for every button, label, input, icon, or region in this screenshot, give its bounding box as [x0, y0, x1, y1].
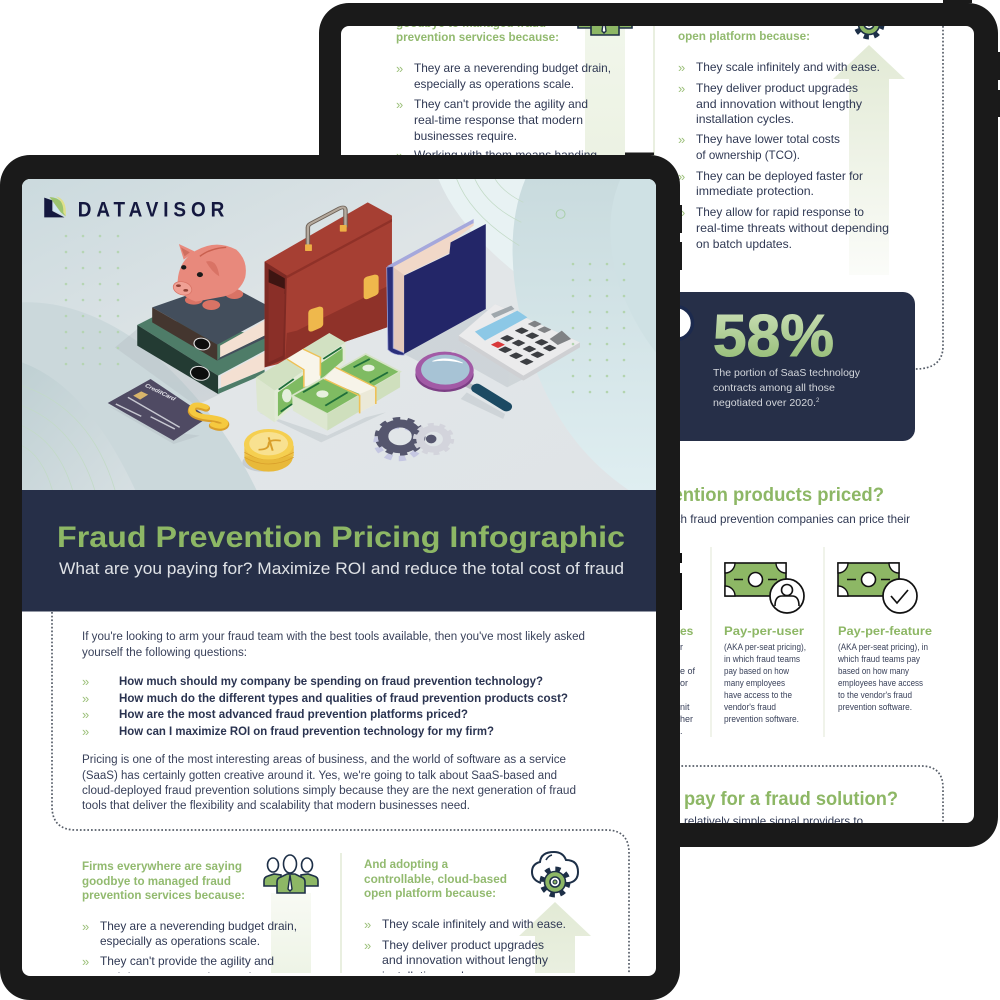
right column: cloud platform: installation cycles.	[382, 969, 480, 983]
question list: How are the most advanced fraud prevention platforms priced?	[119, 709, 468, 721]
left column: managed services: goodbye to managed fraud	[82, 874, 231, 888]
column: pay-per-user: (AKA per-seat pricing),	[724, 642, 806, 652]
icon: people (back)	[577, 26, 633, 36]
clipped body line: relatively simple signal providers to	[684, 814, 863, 828]
right column list on back page: immediate protection.	[696, 184, 814, 198]
icon: cash with user	[725, 563, 804, 613]
dotted connector top	[915, 26, 943, 369]
clipped column: pricing model text	[680, 553, 695, 734]
illustration: money stacks	[256, 333, 400, 431]
column: pay-per-user: pay based on how	[724, 666, 789, 676]
right column: cloud platform: and innovation without lengthy	[382, 953, 548, 967]
right column: cloud platform: controllable, cloud-based	[364, 872, 507, 886]
front tablet bezel	[0, 152, 682, 1000]
illustration: credit card	[108, 379, 208, 441]
icon: cloud gear	[532, 852, 578, 895]
stat panel: 58%: 58%	[713, 303, 834, 369]
pricing paragraph: cloud-deployed fraud prevention solutions simply because they are the next generation of fraud	[82, 785, 576, 797]
right column list on back page: They scale infinitely and with ease.	[696, 60, 880, 74]
stat panel: 58%: contracts among all those	[713, 382, 835, 394]
dotted connector bottom	[681, 765, 944, 822]
right column list on back page: installation cycles.	[696, 112, 794, 126]
hero illustration	[22, 179, 656, 490]
left column list on back page: They are a neverending budget drain,	[414, 61, 611, 75]
right column list on back page: »	[678, 81, 685, 96]
right column list on back page: »	[678, 205, 685, 220]
pricing paragraph: tools that deliver the flexibility and scalability that modern businesses need.	[82, 800, 470, 812]
left column list on back page: »	[396, 61, 403, 76]
left column list on back page: »	[396, 97, 403, 112]
column: pay-per-user: have access to the	[724, 690, 792, 700]
stat panel: 58%: negotiated over 2020.	[713, 397, 816, 409]
back tablet bezel	[319, 0, 1000, 847]
icon: people	[264, 855, 318, 893]
title: Fraud Prevention Pricing Infographic	[57, 521, 625, 554]
column divider	[340, 853, 342, 973]
left column: managed services: »	[82, 954, 89, 969]
question list: »	[82, 691, 89, 706]
icon: cash with check	[838, 563, 917, 613]
right column list on back page: They have lower total costs	[696, 132, 840, 146]
title band	[22, 490, 656, 612]
left column list on back page	[396, 26, 610, 155]
right column list on back page: on batch updates.	[696, 237, 792, 251]
column: pay-per-user: many employees	[724, 678, 785, 688]
right column: cloud platform: open platform because:	[364, 886, 496, 900]
intro paragraph: If you're looking to arm your fraud team with the best tools available, then you've most likely asked	[82, 631, 585, 643]
right column list on back page: open platform because:	[678, 29, 810, 43]
column: pay-per-user: in which fraud teams	[724, 654, 800, 664]
subtitle: What are you paying for? Maximize ROI and reduce the total cost of fraud	[59, 559, 624, 578]
clipped column: pricing model text: es	[680, 624, 694, 638]
right column: cloud platform: They deliver product upgrades	[382, 938, 544, 952]
clipped column: pricing model text: e of	[680, 666, 696, 676]
column: pay-per-feature: to the vendor's fraud	[838, 690, 912, 700]
clipped column: pricing model text: .	[680, 726, 683, 736]
column: pay-per-feature	[837, 563, 932, 712]
column: pay-per-user: vendor's fraud	[724, 702, 776, 712]
clipped column: pricing model text: nit	[680, 702, 690, 712]
left column list on back page: especially as operations scale.	[414, 77, 574, 91]
right column list on back page: They can be deployed faster for	[696, 169, 863, 183]
front tablet	[0, 152, 682, 1000]
front tablet screen	[22, 179, 656, 984]
illustration: piggy bank	[170, 244, 246, 310]
illustration: credit card: CreditCard	[143, 383, 177, 403]
clipped column: pricing model text: or	[680, 678, 688, 688]
left column: managed services: They are a neverending budget drain,	[100, 919, 297, 933]
left column list on back page: businesses require.	[414, 129, 517, 143]
left column: managed services: real-time response that modern	[100, 970, 269, 984]
right column list on back page: real-time threats without depending	[696, 221, 889, 235]
page body clipped	[52, 612, 629, 984]
right column list on back page: »	[678, 132, 685, 147]
column: pay-per-user: Pay-per-user	[724, 624, 804, 638]
icon: cloud gear (back)	[854, 26, 884, 40]
right column list on back page	[678, 29, 889, 251]
pricing paragraph	[82, 754, 576, 812]
right column: cloud platform: And adopting a	[364, 857, 448, 871]
back tablet screen	[341, 0, 974, 828]
column: pay-per-feature: Pay-per-feature	[838, 624, 932, 638]
heading: products priced: How are fraud prevention products priced?	[505, 485, 884, 506]
illustration: gold coins	[242, 429, 294, 472]
left column: managed services: They can't provide the agility and	[100, 954, 274, 968]
illustration: floor shadows	[108, 309, 523, 444]
right column list on back page: of ownership (TCO).	[696, 148, 800, 162]
left column list on back page: Working with them means handing	[414, 148, 597, 162]
question list: How can I maximize ROI on fraud prevention technology for my firm?	[119, 726, 494, 738]
right column list on back page: They allow for rapid response to	[696, 205, 864, 219]
stat panel: 58%	[680, 292, 915, 441]
green strip behind people icon	[271, 893, 311, 973]
illustration: folder	[387, 219, 486, 355]
right column list on back page: They deliver product upgrades	[696, 81, 858, 95]
column: pay-per-feature: which fraud teams pay	[837, 654, 920, 664]
illustration: magnifying glass	[415, 352, 506, 407]
logo: Datavisor	[44, 196, 224, 218]
question list: How much do the different types and qualities of fraud prevention products cost?	[119, 693, 568, 705]
left column list on back page: goodbye to managed fraud	[396, 16, 546, 30]
question list: »	[82, 707, 89, 722]
right column list on back page: »	[678, 60, 685, 75]
right column list on back page: and innovation without lengthy	[696, 97, 862, 111]
illustration: calculator	[459, 304, 580, 381]
illustration: gears	[377, 420, 451, 459]
pricing paragraph: (SaaS) has certainly gotten creative around it. Yes, we're going to talk about SaaS-based and	[82, 770, 557, 782]
left column: managed services: Firms everywhere are saying	[82, 859, 242, 873]
green strip behind people icon	[585, 26, 625, 161]
dot grid left	[65, 235, 119, 365]
arrow: upward growth (back)	[833, 45, 905, 275]
column: pay-per-feature: based on how many	[838, 666, 909, 676]
right column list on back page: »	[678, 169, 685, 184]
illustration: briefcase	[265, 202, 392, 367]
question list: »	[82, 724, 89, 739]
column: pay-per-feature: (AKA per-seat pricing), in	[838, 642, 928, 652]
column: pay-per-user	[724, 563, 806, 724]
illustration: dollar sign	[192, 405, 225, 428]
right column: cloud platform	[364, 857, 566, 983]
back tablet	[319, 0, 1000, 847]
clipped column: pricing model text: her	[680, 714, 693, 724]
left column: managed services: especially as operations scale.	[100, 934, 260, 948]
left column list on back page: They can't provide the agility and	[414, 97, 588, 111]
left column list on back page: prevention services because:	[396, 30, 559, 44]
stat panel: 58%: 2	[816, 398, 820, 404]
right column: cloud platform: »	[364, 938, 371, 953]
hero background shapes	[22, 179, 656, 490]
intro line for pricing models: in which fraud prevention companies can price their	[645, 512, 910, 526]
question list	[82, 674, 568, 739]
stat panel: 58%: The portion of SaaS technology	[713, 367, 861, 379]
left column list on back page: »	[396, 148, 403, 163]
left column: managed services: »	[82, 919, 89, 934]
column: pay-per-user: prevention software.	[724, 714, 799, 724]
left column list on back page: real-time response that modern	[414, 113, 583, 127]
right column: cloud platform: They scale infinitely and with ease.	[382, 917, 566, 931]
left column: managed services: prevention services because:	[82, 888, 245, 902]
dotted connector	[52, 612, 629, 973]
arrow: upward growth	[519, 902, 591, 973]
illustration: binders	[137, 282, 265, 394]
column dividers	[711, 547, 824, 737]
column: pay-per-feature: prevention software.	[838, 702, 912, 712]
dot grid right	[572, 263, 625, 393]
logo: Datavisor: DATAVISOR	[78, 199, 225, 222]
question list: How much should my company be spending on fraud prevention technology?	[119, 676, 543, 688]
intro paragraph	[82, 631, 585, 659]
intro paragraph: yourself the following questions:	[82, 647, 247, 659]
column: pay-per-feature: employees have access	[838, 678, 923, 688]
column divider	[653, 26, 655, 156]
clipped column: pricing model text: r	[680, 642, 683, 652]
right column: cloud platform: »	[364, 917, 371, 932]
left column: managed services	[82, 859, 297, 984]
pricing paragraph: Pricing is one of the most interesting areas of business, and the world of software as a service	[82, 754, 566, 766]
heading: pay for a fraud solution: pay for a fraud solution?	[684, 789, 898, 810]
question list: »	[82, 674, 89, 689]
